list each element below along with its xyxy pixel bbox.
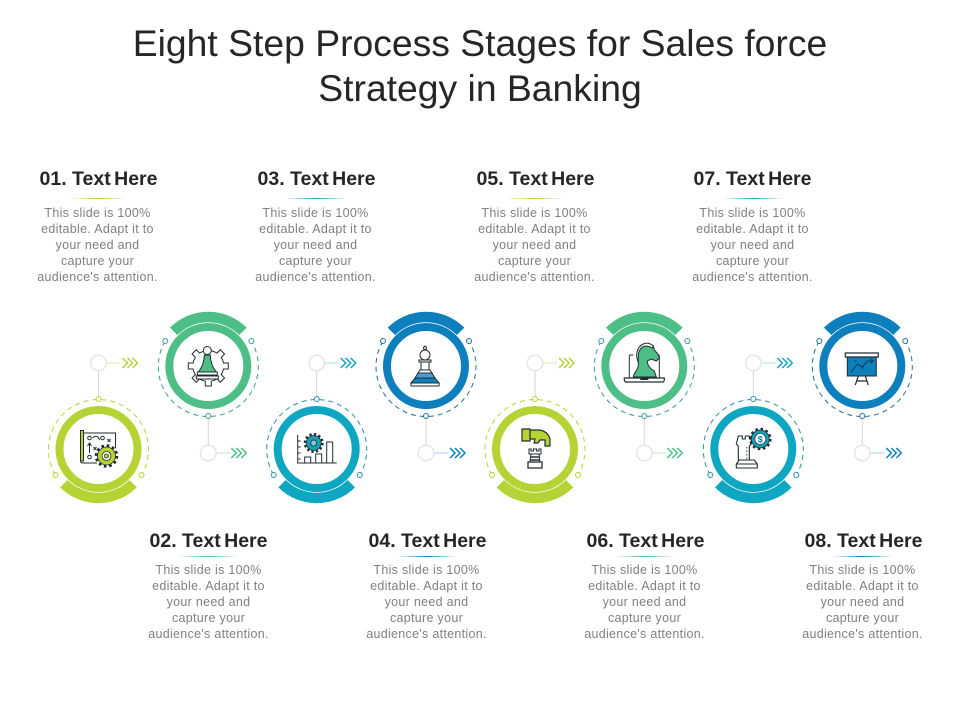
text block: step 01 [37,168,158,284]
text block: step 03 [255,168,376,284]
step 07 node [703,355,803,498]
step 05 node [485,355,585,498]
text block: step 02: capture your [172,611,245,625]
icon: pawn in gear [188,346,229,386]
text block: step 08: your need and [821,595,904,609]
text block: step 07: 07. Text Here [694,168,812,190]
text block: step 06 [584,530,705,641]
icon: presentation board [845,353,878,385]
text block: step 04 [366,530,487,641]
text block: step 08 [802,530,923,641]
text block: step 08: audience's attention. [802,627,923,641]
step 02 node [158,317,258,461]
step 04 node [376,317,476,461]
text block: step 02: your need and [167,595,250,609]
text block: step 06: editable. Adapt it to [588,579,701,593]
text block: step 04: editable. Adapt it to [370,579,483,593]
text block: step 03: This slide is 100% [262,206,369,220]
step 03 node [267,355,367,498]
text block: step 01: audience's attention. [37,270,158,284]
text block: step 02 [148,530,269,641]
text block: step 03: editable. Adapt it to [259,222,372,236]
text block: step 06: This slide is 100% [591,563,698,577]
icon: rook with dollar gear [736,429,770,468]
text block: step 05: 05. Text Here [477,168,595,190]
text block: step 01: capture your [61,254,134,268]
text block: step 04: capture your [390,611,463,625]
text block: step 01: 01. Text Here [40,168,158,190]
text block: step 08: capture your [826,611,899,625]
text block: step 05: capture your [498,254,571,268]
text block: step 07: This slide is 100% [699,206,806,220]
text block: step 08: This slide is 100% [809,563,916,577]
text block: step 05: your need and [493,238,576,252]
text block: step 06: 06. Text Here [587,530,705,552]
text block: step 02: editable. Adapt it to [152,579,265,593]
icon: bar chart with gear [298,434,337,463]
text block: step 04: audience's attention. [366,627,487,641]
text block: step 07: capture your [716,254,789,268]
step 08 node [812,317,912,461]
text block: step 05: editable. Adapt it to [478,222,591,236]
text block: step 05 [474,168,595,284]
text block: step 06: capture your [608,611,681,625]
text block: step 04: 04. Text Here [369,530,487,552]
text block: step 04: This slide is 100% [373,563,480,577]
text block: step 04: your need and [385,595,468,609]
title: Eight Step Process Stages for Sales force [133,22,827,64]
text block: step 02: This slide is 100% [155,563,262,577]
title: Strategy in Banking [318,67,642,109]
text block: step 03: capture your [279,254,352,268]
text block: step 01: your need and [56,238,139,252]
text block: step 03: 03. Text Here [258,168,376,190]
text block: step 02: audience's attention. [148,627,269,641]
text block: step 07: your need and [711,238,794,252]
icon: hand moving rook [522,429,550,468]
text block: step 08: editable. Adapt it to [806,579,919,593]
text block: step 07: audience's attention. [692,270,813,284]
text block: step 03: your need and [274,238,357,252]
text block: step 01: editable. Adapt it to [41,222,154,236]
text block: step 07: editable. Adapt it to [696,222,809,236]
text block: step 07 [692,168,813,284]
icon: rook with dollar gear: $ [758,434,763,444]
icon: bishop chess piece [411,346,439,386]
text block: step 08: 08. Text Here [805,530,923,552]
icon: strategy plan with gear [80,430,118,468]
text block: step 05: This slide is 100% [481,206,588,220]
text block: step 06: audience's attention. [584,627,705,641]
text block: step 03: audience's attention. [255,270,376,284]
text block: step 06: your need and [603,595,686,609]
step 01 node [48,355,148,498]
text block: step 01: This slide is 100% [44,206,151,220]
text block: step 02: 02. Text Here [150,530,268,552]
text block: step 05: audience's attention. [474,270,595,284]
icon: knight on laptop [624,343,664,382]
step 06 node [594,317,694,461]
title [133,22,827,109]
